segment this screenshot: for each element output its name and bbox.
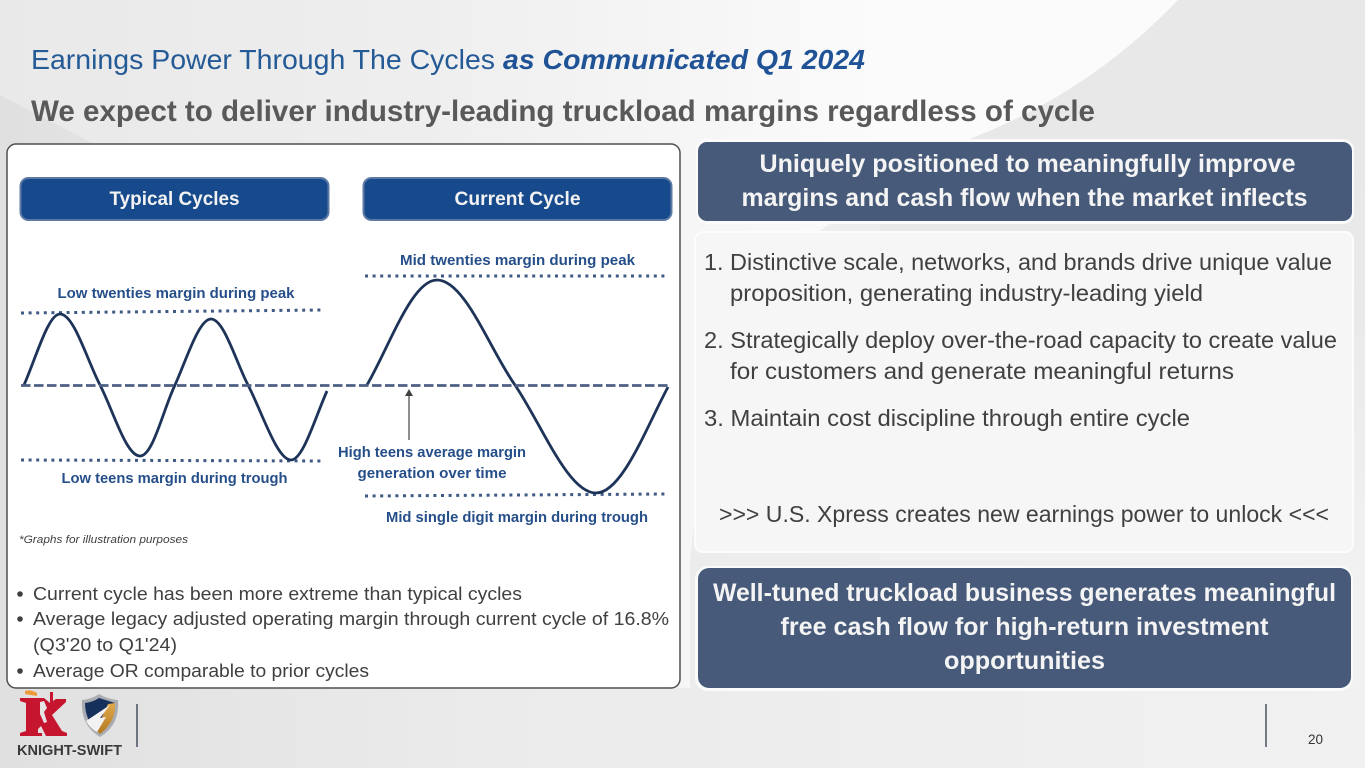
label: high teens average <box>338 445 526 482</box>
bullet list <box>17 584 669 681</box>
callout: uniquely positioned <box>696 139 1354 224</box>
label: mid twenties: Mid twenties margin during peak <box>400 253 636 269</box>
label: low twenties: Low twenties margin during peak <box>58 286 295 302</box>
heading: typical cycles <box>20 178 328 220</box>
title <box>31 44 865 75</box>
bullet list: Average OR comparable to prior cycles <box>33 661 369 681</box>
bullet list: (Q3'20 to Q1'24) <box>33 635 177 655</box>
title: Earnings Power Through The Cycles <box>31 44 495 75</box>
average margin dashed line <box>21 384 668 387</box>
panel: value drivers: 1. Distinctive scale, networks, and brands drive unique value <box>704 249 1332 275</box>
label: high teens average: generation over time <box>358 466 506 482</box>
arrow: average margin <box>405 389 413 440</box>
callout: well-tuned truckload: opportunities <box>944 647 1105 675</box>
logo wordmark: KNIGHT-SWIFT <box>17 743 122 759</box>
panel: value drivers: proposition, generating industry-leading yield <box>730 280 1203 306</box>
label: mid single digit: Mid single digit margin during trough <box>386 510 648 526</box>
panel: value drivers: 2. Strategically deploy over-the-road capacity to create value <box>704 327 1337 353</box>
heading: current cycle <box>364 178 672 220</box>
callout: uniquely positioned: margins and cash flow when the market inflects <box>742 184 1308 212</box>
callout: well-tuned truckload: Well-tuned truckload business generates meaningful <box>713 579 1336 607</box>
bullet list: Average legacy adjusted operating margin through current cycle of 16.8% <box>33 609 669 629</box>
panel: value drivers: 3. Maintain cost discipline through entire cycle <box>704 405 1190 431</box>
heading: current cycle: Current Cycle <box>454 188 581 210</box>
heading: typical cycles: Typical Cycles <box>110 188 240 210</box>
icon: shield <box>82 694 118 737</box>
bullet list: Current cycle has been more extreme than typical cycles <box>33 584 522 604</box>
label: high teens average: High teens average margin <box>338 445 526 461</box>
chart: typical cycles wave <box>21 310 327 461</box>
chart: current cycle wave <box>365 276 668 496</box>
panel: value drivers <box>695 232 1353 552</box>
panel: value drivers: >>> U.S. Xpress creates new earnings power to unlock <<< <box>719 501 1329 527</box>
heading: We expect to deliver industry-leading truckload margins regardless of cycle <box>31 95 1095 128</box>
title: as Communicated Q1 2024 <box>503 44 865 75</box>
icon: knight K <box>20 690 67 736</box>
page number: 20 <box>1308 732 1323 747</box>
footnote: *Graphs for illustration purposes <box>19 534 189 546</box>
label: low teens: Low teens margin during trough <box>62 471 288 487</box>
panel: cycles chart <box>7 144 680 688</box>
panel: value drivers: for customers and generate meaningful returns <box>730 358 1234 384</box>
callout: well-tuned truckload: free cash flow for high-return investment <box>780 613 1269 641</box>
logo: Knight-Swift <box>17 690 122 759</box>
callout: well-tuned truckload <box>695 566 1353 691</box>
callout: uniquely positioned: Uniquely positioned to meaningfully improve <box>760 150 1296 178</box>
